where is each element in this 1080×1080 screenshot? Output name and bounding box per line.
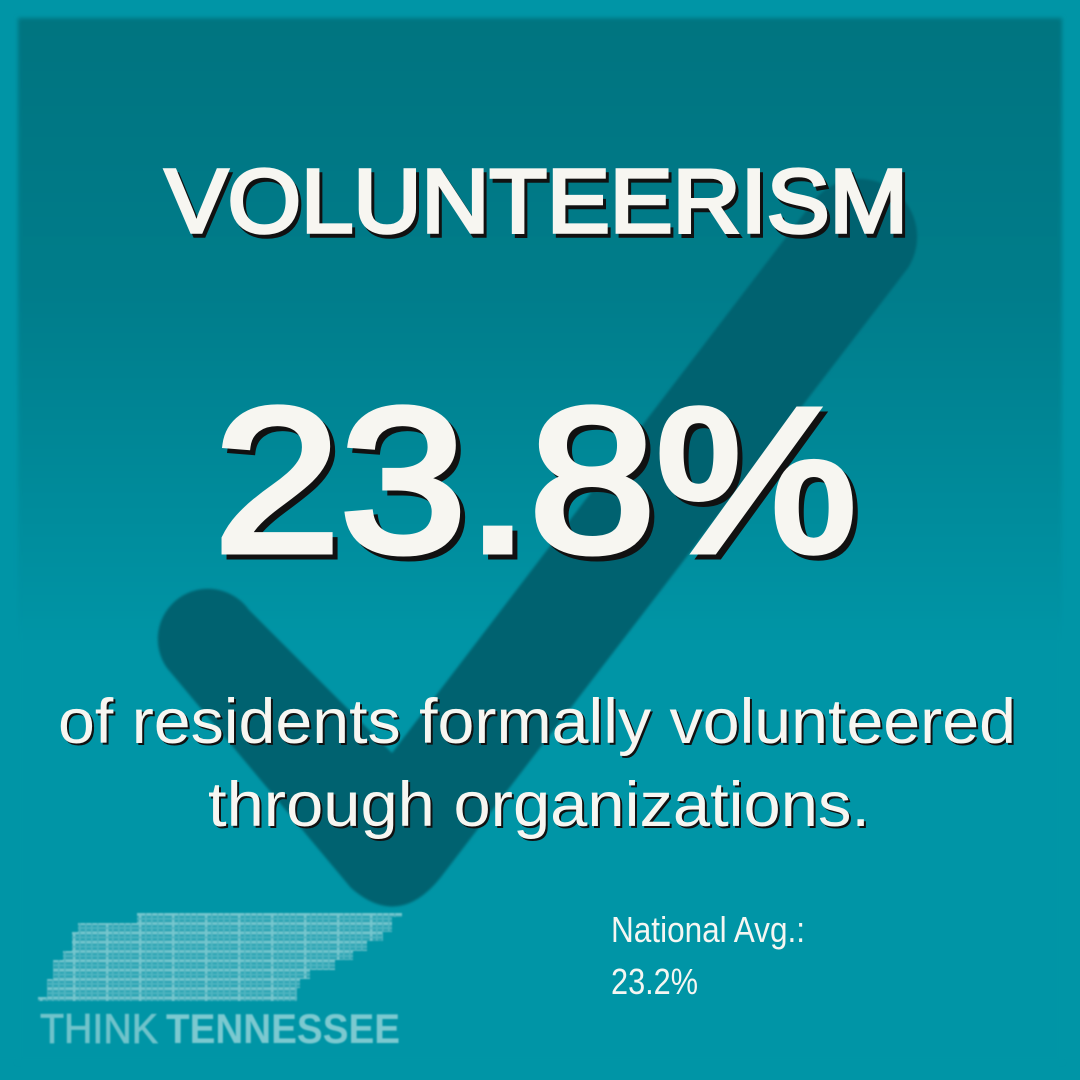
logo wordmark bbox=[40, 1005, 400, 1052]
icon: large background check mark bbox=[158, 179, 917, 907]
logo wordmark: TENNESSEE bbox=[166, 1005, 400, 1052]
main statistic: 23.8% bbox=[214, 366, 857, 595]
national average bbox=[611, 909, 805, 1002]
title: VOLUNTEERISM bbox=[165, 152, 908, 252]
description text: of residents formally volunteered bbox=[58, 687, 1016, 757]
main statistic: 23.8% bbox=[219, 371, 862, 600]
national average: National Avg.: bbox=[611, 909, 805, 950]
description text: through organizations. bbox=[210, 772, 872, 842]
description text: through organizations. bbox=[208, 770, 870, 840]
description text: of residents formally volunteered bbox=[60, 689, 1018, 759]
logo: Think Tennessee bbox=[37, 912, 403, 1044]
icon: Tennessee state grid bbox=[37, 912, 403, 1002]
title: VOLUNTEERISM bbox=[168, 156, 911, 256]
description text bbox=[58, 687, 1018, 842]
logo wordmark: THINK bbox=[40, 1005, 158, 1052]
national average: 23.2% bbox=[611, 961, 698, 1002]
